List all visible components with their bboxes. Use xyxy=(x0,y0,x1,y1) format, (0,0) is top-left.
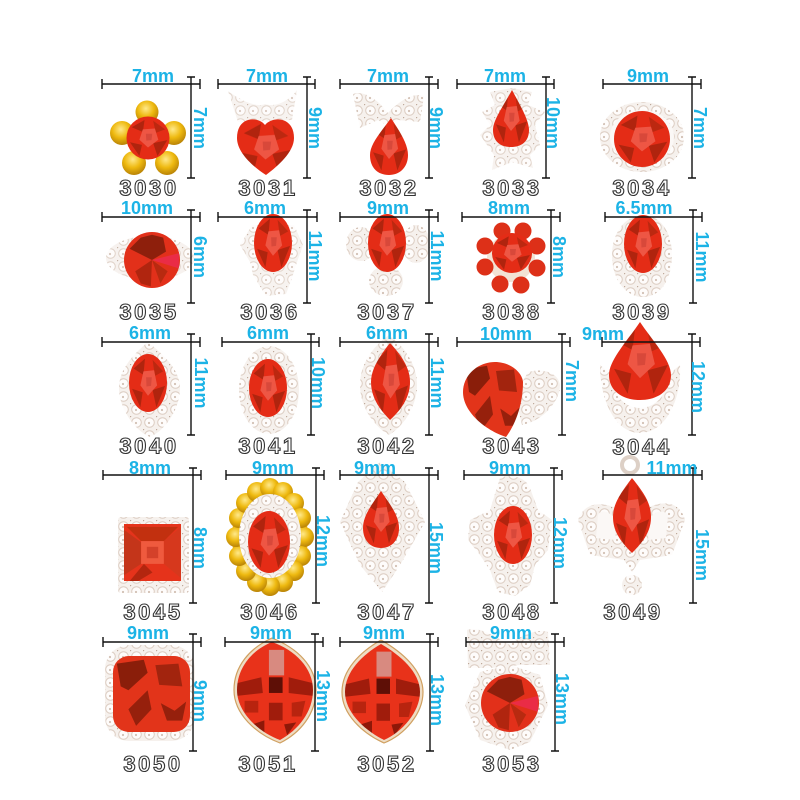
width label: 6mm xyxy=(129,323,171,343)
product number: 3053 xyxy=(482,752,542,776)
height label: 10mm xyxy=(543,97,563,149)
product number: 3045 xyxy=(123,600,183,624)
jewel: heart with silver wings xyxy=(228,90,297,175)
product number: 3033 xyxy=(482,176,542,200)
width label: 11mm xyxy=(646,458,698,478)
width label: 9mm xyxy=(127,623,169,643)
product number: 3043 xyxy=(482,434,542,458)
width label: 9mm xyxy=(627,66,669,86)
jewel: oval stone in silver rhinestone frame xyxy=(612,215,672,297)
jewel: oval stone in silver halo xyxy=(239,346,299,434)
item 3046 xyxy=(226,458,333,624)
jewel: marquise stone in silver frame xyxy=(360,335,417,435)
item 3041 xyxy=(222,323,328,458)
width label: 10mm xyxy=(121,198,173,218)
product number: 3049 xyxy=(603,600,663,624)
height label: 13mm xyxy=(552,673,572,725)
dimension lines xyxy=(457,334,570,435)
jewel: drop in silver diamond frame xyxy=(340,462,425,592)
dimension lines xyxy=(103,634,201,751)
dimension lines xyxy=(340,77,438,178)
dimension lines xyxy=(102,210,200,303)
item 3044 xyxy=(582,322,708,460)
item 3034 xyxy=(600,66,710,200)
product number: 3047 xyxy=(357,600,417,624)
product number: 3035 xyxy=(119,300,179,324)
width label: 9mm xyxy=(363,623,405,643)
height label: 10mm xyxy=(308,357,328,409)
dimension lines xyxy=(340,210,438,303)
height label: 7mm xyxy=(562,360,582,402)
jewel: square stone in silver frame xyxy=(118,517,189,593)
product number: 3036 xyxy=(240,300,300,324)
dimension lines xyxy=(605,210,702,303)
product number: 3052 xyxy=(357,752,417,776)
dimension lines xyxy=(102,334,200,435)
dimension lines xyxy=(218,210,317,303)
height label: 13mm xyxy=(313,670,333,722)
width label: 9mm xyxy=(252,458,294,478)
width label: 8mm xyxy=(488,198,530,218)
dimension lines xyxy=(102,77,200,178)
height label: 8mm xyxy=(190,527,210,569)
product number: 3040 xyxy=(119,434,179,458)
height label: 12mm xyxy=(688,361,708,413)
item 3048 xyxy=(464,458,570,624)
width label: 9mm xyxy=(367,198,409,218)
jewel: oval stone in gold scalloped frame xyxy=(226,478,314,596)
height label: 13mm xyxy=(427,674,447,726)
width label: 7mm xyxy=(132,66,174,86)
width label: 6.5mm xyxy=(615,198,673,218)
item 3053 xyxy=(465,623,572,776)
width label: 6mm xyxy=(247,323,289,343)
item 3047 xyxy=(340,458,446,624)
height label: 11mm xyxy=(427,230,447,282)
product number: 3042 xyxy=(357,434,417,458)
jewel: large drop with silver crescent xyxy=(600,322,680,433)
item 3042 xyxy=(340,323,447,458)
width label: 10mm xyxy=(480,324,532,344)
height label: 9mm xyxy=(190,680,210,722)
jewel: drop with silver bow xyxy=(353,93,424,175)
item 3037 xyxy=(340,198,447,324)
dimension lines xyxy=(218,77,315,178)
item 3033 xyxy=(457,66,563,200)
item 3038 xyxy=(462,198,569,324)
height label: 15mm xyxy=(692,529,712,581)
dimension lines xyxy=(340,468,438,603)
jewel: tilted drop with silver wing xyxy=(463,362,560,437)
dimension lines xyxy=(603,468,702,603)
item 3040 xyxy=(102,323,211,458)
height label: 11mm xyxy=(692,231,712,283)
width label: 7mm xyxy=(367,66,409,86)
width label: 6mm xyxy=(244,198,286,218)
dimension lines xyxy=(103,468,201,603)
product number: 3032 xyxy=(359,176,419,200)
jewel: oval stone in silver diamond frame xyxy=(119,342,180,437)
height label: 11mm xyxy=(427,357,447,409)
product number: 3037 xyxy=(357,300,417,324)
dimension lines xyxy=(603,77,701,178)
dimension lines xyxy=(457,77,554,178)
width label: 7mm xyxy=(246,66,288,86)
dimension lines xyxy=(222,334,319,435)
product number: 3039 xyxy=(612,300,672,324)
height label: 6mm xyxy=(190,236,210,278)
dimension lines xyxy=(226,468,324,603)
item 3050 xyxy=(103,623,210,776)
jewel: oval stone in silver floral frame xyxy=(468,476,552,596)
jewel: marquise stone on silver crown xyxy=(578,457,685,595)
product number: 3041 xyxy=(238,434,298,458)
jewel: oval stone with silver base xyxy=(240,214,303,296)
width label: 9mm xyxy=(489,458,531,478)
width label: 9mm xyxy=(250,623,292,643)
height label: 11mm xyxy=(305,230,325,282)
item 3052 xyxy=(340,623,447,776)
height label: 15mm xyxy=(426,522,446,574)
height label: 11mm xyxy=(191,357,211,409)
item 3035 xyxy=(102,198,210,324)
jewel: round stone in silver ring xyxy=(600,102,684,172)
jewel: rivoli stone with silver bow xyxy=(465,629,550,750)
height label: 7mm xyxy=(190,107,210,149)
product number: 3050 xyxy=(123,752,183,776)
item 3030 xyxy=(102,66,210,200)
width label: 8mm xyxy=(129,458,171,478)
jewel: oval stone with silver flower sides xyxy=(346,214,430,296)
dimension lines xyxy=(462,210,560,303)
item 3032 xyxy=(340,66,446,200)
product number: 3038 xyxy=(482,300,542,324)
height label: 12mm xyxy=(313,515,333,567)
item 3049 xyxy=(578,457,712,624)
product number: 3031 xyxy=(238,176,298,200)
product number: 3030 xyxy=(119,176,179,200)
jewel: red flower of eight petals xyxy=(476,222,546,294)
item 3043 xyxy=(457,324,582,458)
jewel: drop with silver star frame xyxy=(480,88,545,170)
width label: 9mm xyxy=(354,458,396,478)
width label: 6mm xyxy=(366,323,408,343)
height label: 9mm xyxy=(305,107,325,149)
product number: 3048 xyxy=(482,600,542,624)
jewel: cushion stone in silver frame xyxy=(105,645,195,741)
item 3039 xyxy=(605,198,712,324)
height label: 12mm xyxy=(550,517,570,569)
dimension lines xyxy=(340,634,438,751)
width label: 7mm xyxy=(484,66,526,86)
dimension lines xyxy=(340,334,438,435)
jewel: rivoli stone with silver sides xyxy=(106,232,194,288)
height label: 8mm xyxy=(549,236,569,278)
dimension lines xyxy=(464,468,562,603)
item 3031 xyxy=(218,66,325,200)
width label: 9mm xyxy=(490,623,532,643)
height label: 7mm xyxy=(690,107,710,149)
product number: 3044 xyxy=(612,434,672,460)
width label: 9mm xyxy=(582,324,624,344)
jewel: gold flower with red stone xyxy=(110,100,186,175)
dimension lines xyxy=(602,334,700,435)
dimension lines xyxy=(225,634,323,751)
jewel: leaf-shaped mirror stone xyxy=(342,640,423,743)
item 3045 xyxy=(103,458,210,624)
item 3036 xyxy=(218,198,325,324)
height label: 9mm xyxy=(426,107,446,149)
product number: 3046 xyxy=(240,600,300,624)
product number: 3034 xyxy=(612,176,672,200)
product number: 3051 xyxy=(238,752,298,776)
item 3051 xyxy=(225,623,333,776)
dimension lines xyxy=(466,634,564,751)
jewel: leaf-shaped mirror stone xyxy=(234,638,316,743)
